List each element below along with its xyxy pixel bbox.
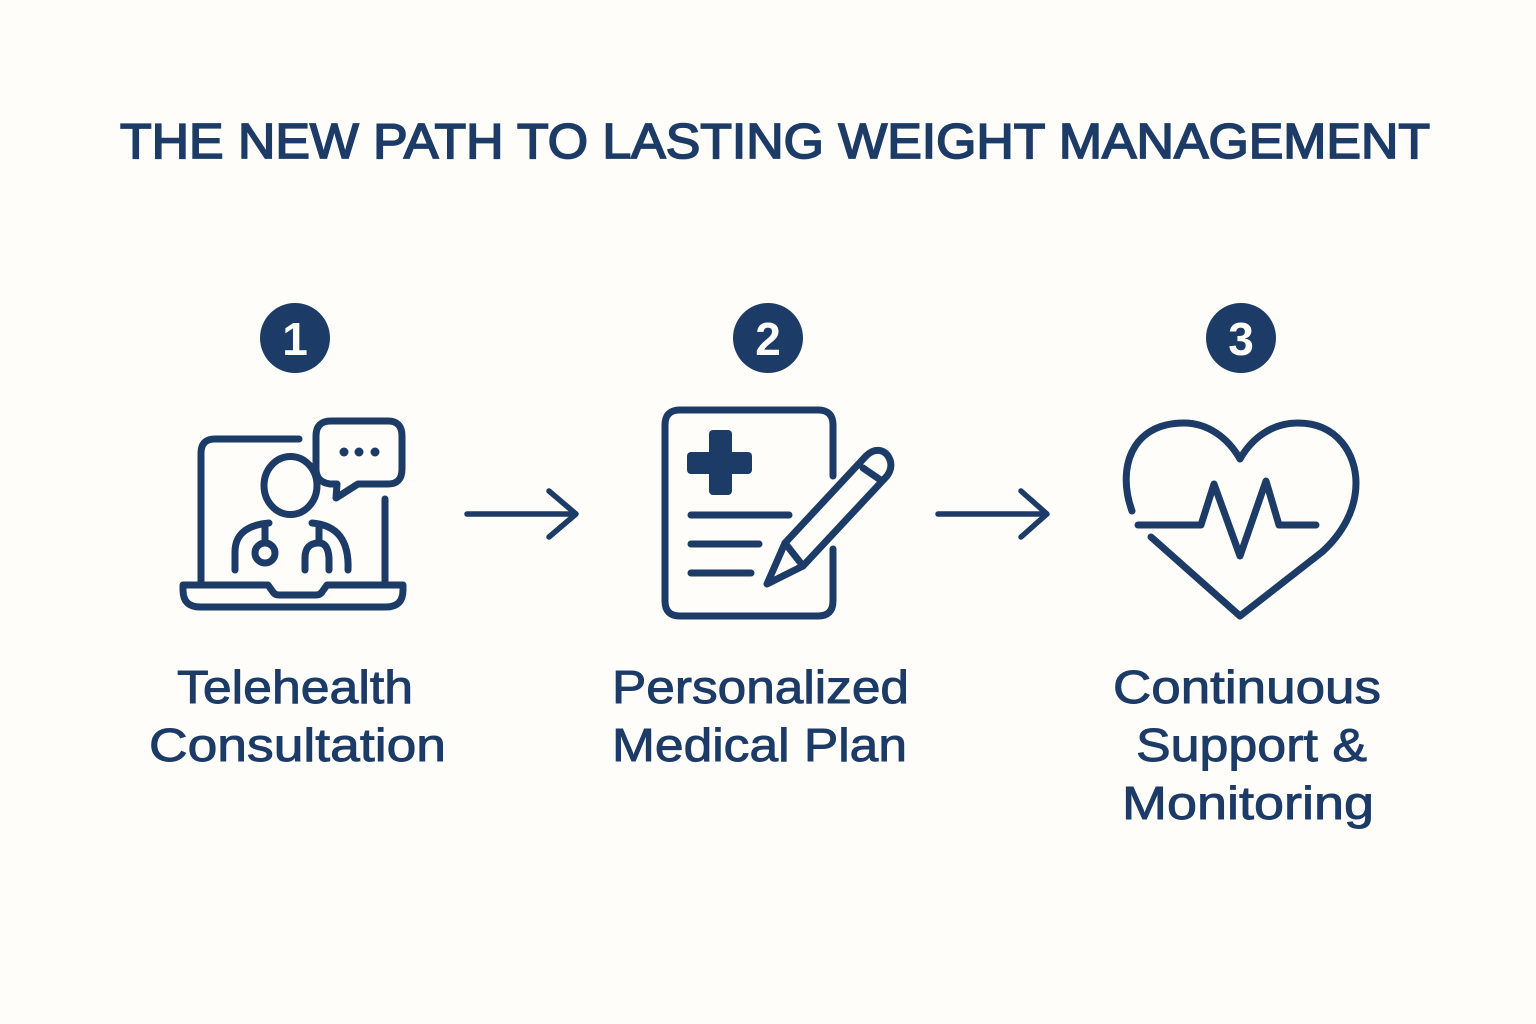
label: Telehealth Consultation: Telehealth xyxy=(177,661,413,713)
number badge 2: 2 xyxy=(755,313,781,365)
label: Personalized Medical Plan: Medical Plan xyxy=(612,719,907,771)
number badge 1: 1 xyxy=(282,313,308,365)
step 3 xyxy=(1113,303,1381,829)
number badge 1 xyxy=(260,303,330,373)
icon: heart with pulse line xyxy=(1126,423,1356,616)
number badge 3 xyxy=(1206,303,1276,373)
label: Personalized Medical Plan xyxy=(612,661,909,771)
label: Continuous Support & Monitoring: Support & xyxy=(1136,719,1367,771)
arrow 2 to 3 xyxy=(938,491,1047,537)
step 1 xyxy=(149,303,446,771)
step 2 xyxy=(612,303,909,771)
number badge 2 xyxy=(733,303,803,373)
title: THE NEW PATH TO LASTING WEIGHT MANAGEMENT xyxy=(120,115,1430,169)
label: Personalized Medical Plan: Personalized xyxy=(612,661,909,713)
icon: medical plan clipboard with pencil xyxy=(665,410,891,616)
label: Telehealth Consultation xyxy=(149,661,446,771)
arrow 1 to 2 xyxy=(467,491,576,537)
label: Continuous Support & Monitoring: Continuous xyxy=(1113,661,1381,713)
label: Telehealth Consultation: Consultation xyxy=(149,719,446,771)
number badge 3: 3 xyxy=(1228,313,1254,365)
label: Continuous Support & Monitoring xyxy=(1113,661,1381,829)
label: Continuous Support & Monitoring: Monitoring xyxy=(1122,777,1374,829)
icon: telehealth laptop with doctor xyxy=(183,421,403,607)
